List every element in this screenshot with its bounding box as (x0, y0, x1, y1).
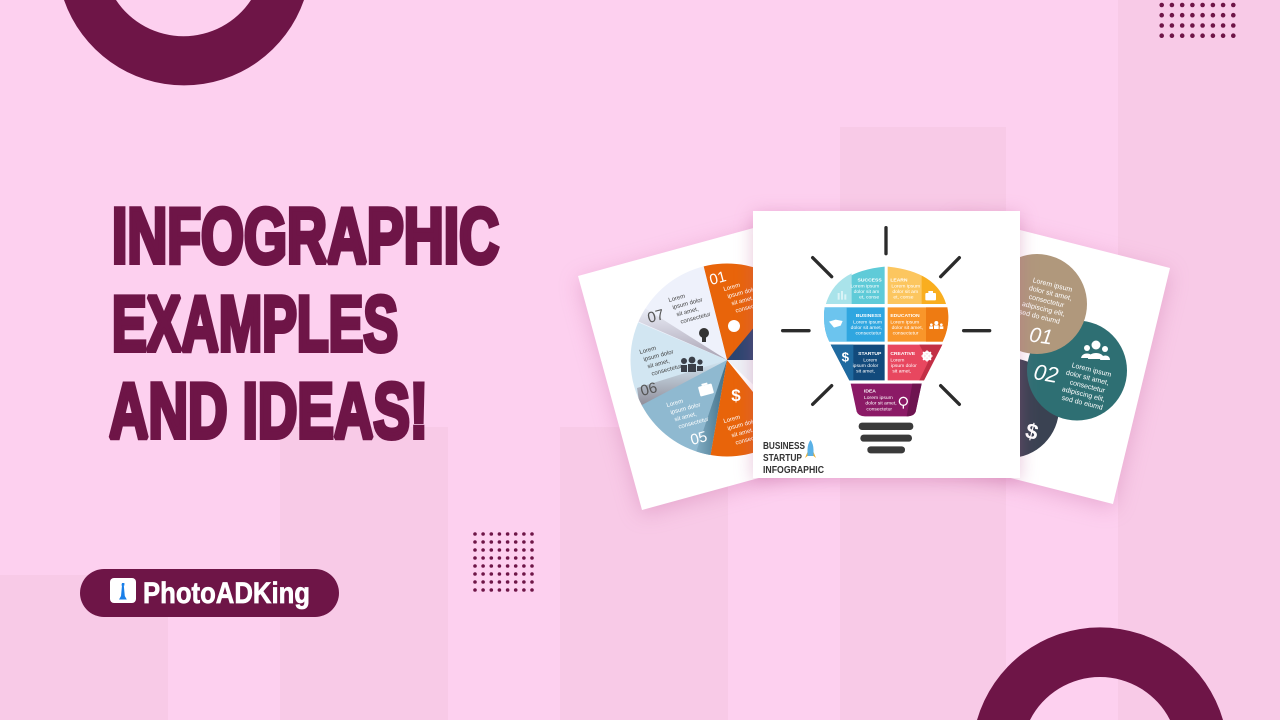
circle 02 teal: Lorem ipsum (1071, 362, 1112, 379)
slice 04 orange (710, 360, 753, 456)
pie labels: 05 (689, 428, 709, 449)
circle 01 tan: Lorem ipsum (1032, 277, 1073, 294)
segment: startup: sit amet, (856, 369, 875, 375)
icon: gear (921, 350, 933, 362)
card caption: STARTUP (763, 453, 802, 464)
pie labels: ipsum dolor (643, 349, 674, 363)
segment: success: Lorem ipsum (851, 283, 879, 289)
pie labels: consectetur (678, 417, 709, 431)
segment: success: et, conse (859, 295, 880, 301)
icon: team (681, 357, 703, 372)
circle 02 teal: dolor sit amet, (1065, 370, 1110, 387)
segment: creative: Lorem (890, 357, 904, 363)
slice 07 (638, 266, 727, 360)
circle 01 tan: 01 (1028, 323, 1054, 350)
segment: learn: et, conse (893, 295, 914, 301)
segment: business: dolor sit amet, (851, 325, 882, 331)
pie labels: 07 (646, 306, 666, 327)
segment: learn: Lorem ipsum (891, 283, 920, 289)
circle 01 tan: consectetur (1028, 294, 1065, 309)
segment: business: BUSINESS (856, 313, 882, 319)
segment: success: SUCCESS (858, 277, 882, 283)
panel: center card (753, 211, 1020, 478)
segment: idea: dolor sit amet, (865, 401, 897, 407)
title: INFOGRAPHIC (112, 192, 499, 280)
icon: bulb (899, 397, 907, 409)
slice 01 orange (704, 264, 753, 360)
segment: idea (851, 384, 922, 416)
pie labels: sit amet, (731, 428, 755, 439)
segment: startup: ipsum dolor (853, 363, 879, 369)
segment: education: Lorem ipsum (890, 319, 919, 325)
circle 02 teal: sed do eiumd (1061, 395, 1104, 412)
dot grid: lower middle (473, 532, 534, 592)
segment: idea: Lorem ipsum (864, 395, 893, 401)
segment: business: Lorem ipsum (853, 319, 882, 325)
segment: idea: IDEA (864, 388, 876, 394)
segment: creative: sit amet, (892, 369, 911, 375)
pie labels: consectetur (735, 301, 766, 315)
pie labels: sit amet, (676, 307, 700, 318)
pie labels: 06 (639, 379, 659, 400)
pie labels: $ (731, 386, 741, 405)
icon: chart (838, 291, 846, 300)
card caption: INFOGRAPHIC (763, 465, 824, 476)
segment: education (888, 307, 948, 342)
pie labels: Lorem (668, 294, 686, 304)
icon: rocket (805, 440, 816, 458)
slice 05 (642, 360, 727, 455)
pie labels: Lorem (639, 346, 657, 356)
circle 02 teal (1027, 320, 1127, 420)
pie labels: ipsum dolor (672, 297, 703, 311)
pie labels: Lorem (723, 283, 741, 293)
panel: right card with circles (900, 214, 1170, 504)
panel: left card with pie chart (574, 226, 800, 518)
segment: learn: dolor sit am (892, 289, 918, 295)
pie labels: Lorem (666, 399, 684, 409)
icon: briefcase (697, 381, 714, 397)
circle 02 teal: 02 (1032, 359, 1060, 388)
logo icon: chess piece (110, 578, 136, 603)
title: EXAMPLES (112, 280, 398, 368)
segment: business (824, 307, 885, 342)
pie labels: ipsum dolor (727, 418, 758, 432)
pie labels: consectetur (651, 364, 682, 378)
segment: business: consectetur (856, 331, 882, 337)
logo wordmark: PhotoADKing (143, 577, 310, 610)
pie chart (630, 264, 753, 456)
rays (783, 228, 990, 404)
icon: briefcase (925, 291, 936, 300)
segment: creative (888, 345, 942, 380)
card caption (763, 441, 824, 476)
circle 01 tan: dolor sit amet, (1028, 285, 1073, 303)
pie labels: ipsum dolor (670, 402, 701, 416)
circle 01 tan: adipiscing elit, (1021, 301, 1066, 318)
pie labels (639, 268, 766, 449)
segment: learn (888, 267, 946, 304)
segment: education: consectetur (893, 331, 919, 337)
segment: startup: $ (842, 350, 850, 365)
circle 03 dark: $ (1023, 418, 1041, 445)
segment: creative: ipsum dolor (891, 363, 917, 369)
pie labels: sit amet, (647, 359, 671, 370)
segment: creative: CREATIVE (890, 351, 916, 357)
segment: education: EDUCATION (890, 313, 920, 319)
pie labels: sit amet, (731, 296, 755, 307)
pie labels: consectetur (680, 312, 711, 326)
pie labels: 01 (708, 268, 728, 289)
icon: light bulb (699, 328, 709, 342)
circle 03 dark (959, 358, 1059, 458)
icon: handshake (829, 320, 843, 328)
segment: startup: STARTUP (858, 351, 882, 357)
decorative ring: top left (64, 0, 304, 85)
circle 01 tan (987, 254, 1087, 354)
segment: learn: LEARN (890, 277, 908, 283)
segment: startup (831, 345, 885, 380)
segment: success (826, 267, 885, 304)
segment: success: dolor sit am (854, 289, 879, 295)
decorative ring: bottom right (977, 627, 1223, 720)
pie labels: consectetur (735, 433, 766, 447)
title (109, 192, 499, 454)
dot grid: top right (1159, 3, 1236, 38)
logo pill (80, 569, 339, 617)
bulb base bars (859, 423, 913, 453)
circle 02 teal: adipiscing elit, (1061, 386, 1105, 404)
slice 06 (630, 322, 726, 402)
wedge white (727, 360, 753, 384)
circle 02 teal: consectetur (1069, 379, 1106, 395)
circle 01 tan: sed do eiumd (1018, 309, 1061, 326)
segment: startup: Lorem (863, 357, 877, 363)
wedge navy (727, 328, 753, 360)
pie labels: Lorem (723, 415, 741, 425)
segment: idea: consectetur (866, 406, 892, 412)
title: AND IDEAS! (109, 366, 428, 454)
segment: education: dolor sit amet, (892, 325, 923, 331)
card caption: BUSINESS (763, 441, 805, 452)
icon: team (929, 321, 943, 329)
pie labels: ipsum dolor (727, 286, 758, 300)
pie labels: sit amet, (674, 412, 698, 423)
icon: people (1081, 340, 1110, 360)
light bulb diagram (783, 228, 990, 453)
